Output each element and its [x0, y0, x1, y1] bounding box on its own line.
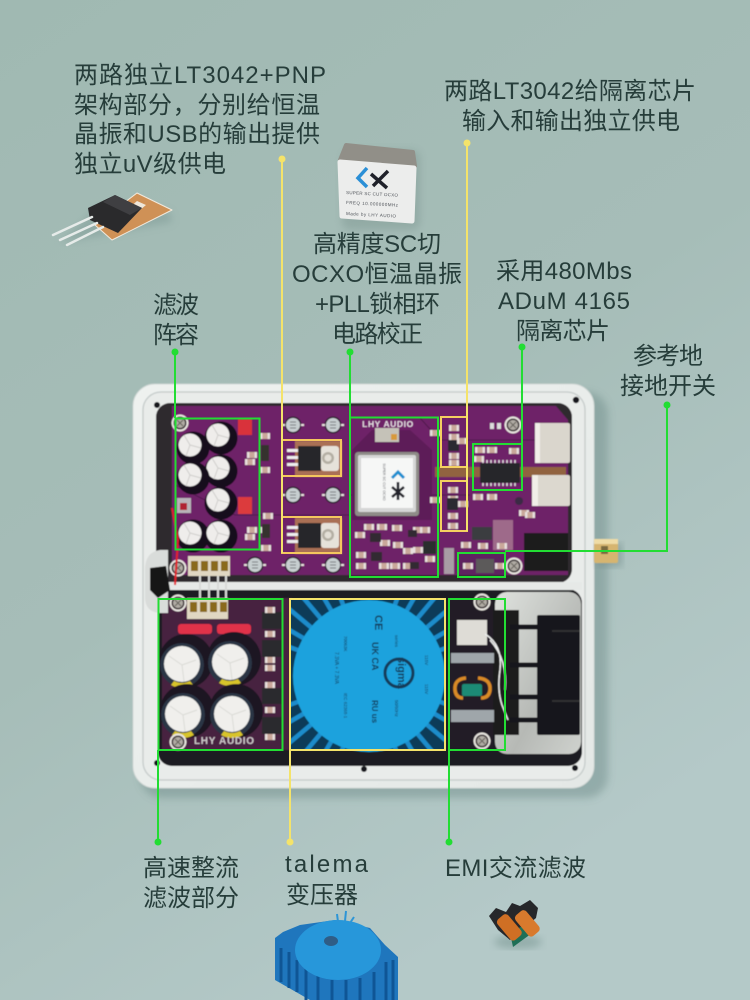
box: regulator 1	[282, 440, 341, 476]
label: filter caps	[153, 292, 199, 349]
box: filter caps	[176, 418, 260, 550]
leader lines	[158, 143, 667, 842]
transformer printing: UK CA	[370, 642, 380, 671]
usb port a	[535, 423, 570, 463]
label: filter caps: 阵容	[153, 322, 199, 349]
transformer printing: RU us	[370, 700, 379, 724]
ground switch	[459, 542, 507, 575]
transformer printing: CE	[372, 615, 384, 630]
label: ground switch	[620, 343, 716, 400]
label: rectifier: 高速整流	[143, 855, 239, 882]
leader: rectifier	[157, 750, 159, 842]
ocxo label text: FREQ 10.000000MHz	[346, 200, 399, 208]
connector upper	[188, 556, 230, 598]
screws lower	[170, 594, 490, 750]
leader: transformer	[289, 750, 291, 842]
transformer printing: 7.3VA + 7.3VA	[333, 652, 339, 685]
label: transformer	[285, 851, 369, 909]
leader: adum	[521, 347, 523, 445]
ocxo smd area	[355, 524, 454, 574]
optical socket	[524, 533, 568, 571]
isolated supply parts	[430, 423, 535, 550]
corner holes	[154, 397, 579, 772]
label: ocxo: 高精度SC切	[313, 231, 441, 258]
box: regulator 2	[282, 517, 341, 553]
icon: emi inductor	[489, 900, 542, 949]
label: isolated supply: 两路LT3042给隔离芯片	[444, 78, 696, 105]
transformer printing	[333, 615, 429, 724]
label: rectifier	[143, 855, 239, 912]
upper compartment	[156, 403, 572, 583]
device photo	[133, 384, 622, 798]
ocxo module	[352, 419, 432, 520]
box: ocxo	[350, 418, 438, 577]
label: transformer: talema	[285, 851, 369, 878]
transformer printing: IEC 62368-1	[343, 693, 348, 719]
leader: ground switch	[505, 405, 667, 551]
box: ground switch	[458, 553, 505, 577]
label: adum: 采用480Mbs	[496, 258, 632, 285]
box: rectifier	[158, 599, 282, 750]
pcb brand: LHY AUDIO	[362, 419, 414, 429]
label: emi: EMI交流滤波	[445, 855, 586, 882]
label: regulator description: 独立uV级供电	[74, 151, 226, 178]
label: regulator description	[74, 62, 326, 178]
lower pcb brand: LHY AUDIO	[194, 736, 255, 747]
label: isolated supply	[444, 78, 696, 135]
box: isolated supply 1	[441, 417, 467, 467]
transformer printing: 50/60Hz	[394, 700, 399, 718]
leader dots	[154, 140, 670, 846]
leader: ocxo	[349, 353, 351, 418]
lower compartment	[157, 589, 583, 767]
screws upper	[170, 414, 522, 576]
callout: bridge outlines	[158, 417, 522, 750]
power inlet	[510, 615, 580, 735]
transformer printing: 70063K	[343, 636, 348, 652]
usb port b	[532, 475, 570, 506]
white wires	[485, 634, 508, 720]
label: ocxo: +PLL锁相环	[315, 291, 440, 318]
upper pcb	[172, 406, 568, 575]
outer case	[133, 384, 594, 788]
icon: ocxo module	[340, 145, 420, 230]
label: rectifier: 滤波部分	[143, 885, 239, 912]
label: isolated supply: 输入和输出独立供电	[462, 108, 680, 135]
bnc ground connector	[594, 539, 622, 567]
label: regulator description: 两路独立LT3042+PNP	[74, 62, 326, 89]
transformer printing: 115V	[424, 684, 429, 694]
transformer top	[291, 600, 444, 753]
power wires	[150, 508, 178, 598]
lower pcb rectifier	[159, 598, 292, 750]
small capacitors	[244, 416, 344, 574]
leader: emi	[448, 750, 450, 842]
label: adum	[496, 258, 632, 345]
box: isolated supply 2	[441, 481, 467, 531]
ocxo label text	[346, 190, 399, 219]
icon: transformer	[275, 911, 398, 1000]
case shadow	[140, 392, 608, 798]
label: ground switch: 参考地	[633, 343, 703, 370]
label: filter caps: 滤波	[153, 292, 199, 319]
smd cluster filter	[176, 419, 273, 552]
adum isolator chip	[474, 447, 520, 486]
label: adum: ADuM 4165	[498, 288, 630, 315]
ocxo label text: SUPER SC CUT OCXO	[346, 190, 399, 198]
transformer printing: 115V	[424, 655, 429, 665]
box: emi	[449, 599, 505, 750]
ocxo label text: Made by LHY AUDIO	[346, 211, 397, 219]
gold trace	[435, 467, 566, 477]
transformer printing: series	[394, 635, 399, 648]
box: transformer	[290, 599, 445, 750]
left notch	[145, 550, 168, 613]
label: regulator description: 架构部分，分别给恒温	[74, 92, 320, 119]
case inner bevel	[143, 392, 585, 780]
leader: filter	[174, 353, 176, 418]
label: ocxo: OCXO恒温晶振	[292, 261, 462, 288]
leader: isolated supply	[466, 143, 468, 531]
leader: regulators	[281, 159, 283, 553]
label: regulator description: 晶振和USB的输出提供	[74, 121, 320, 148]
label: ground switch: 接地开关	[620, 373, 716, 400]
icon: to-220 regulator	[53, 193, 172, 245]
label: adum: 隔离芯片	[516, 318, 610, 345]
box: adum isolator	[473, 444, 522, 490]
emi filter	[450, 598, 519, 748]
ldo regulators	[287, 441, 342, 554]
transformer printing: sigma	[395, 657, 407, 690]
connector lower	[187, 598, 228, 619]
middle bar	[168, 582, 582, 590]
label: ocxo	[292, 231, 462, 348]
label: transformer: 变压器	[286, 882, 358, 909]
ocxo small text: SUPER SC CUT OCXO	[382, 463, 386, 501]
label: ocxo: 电路校正	[332, 321, 423, 348]
